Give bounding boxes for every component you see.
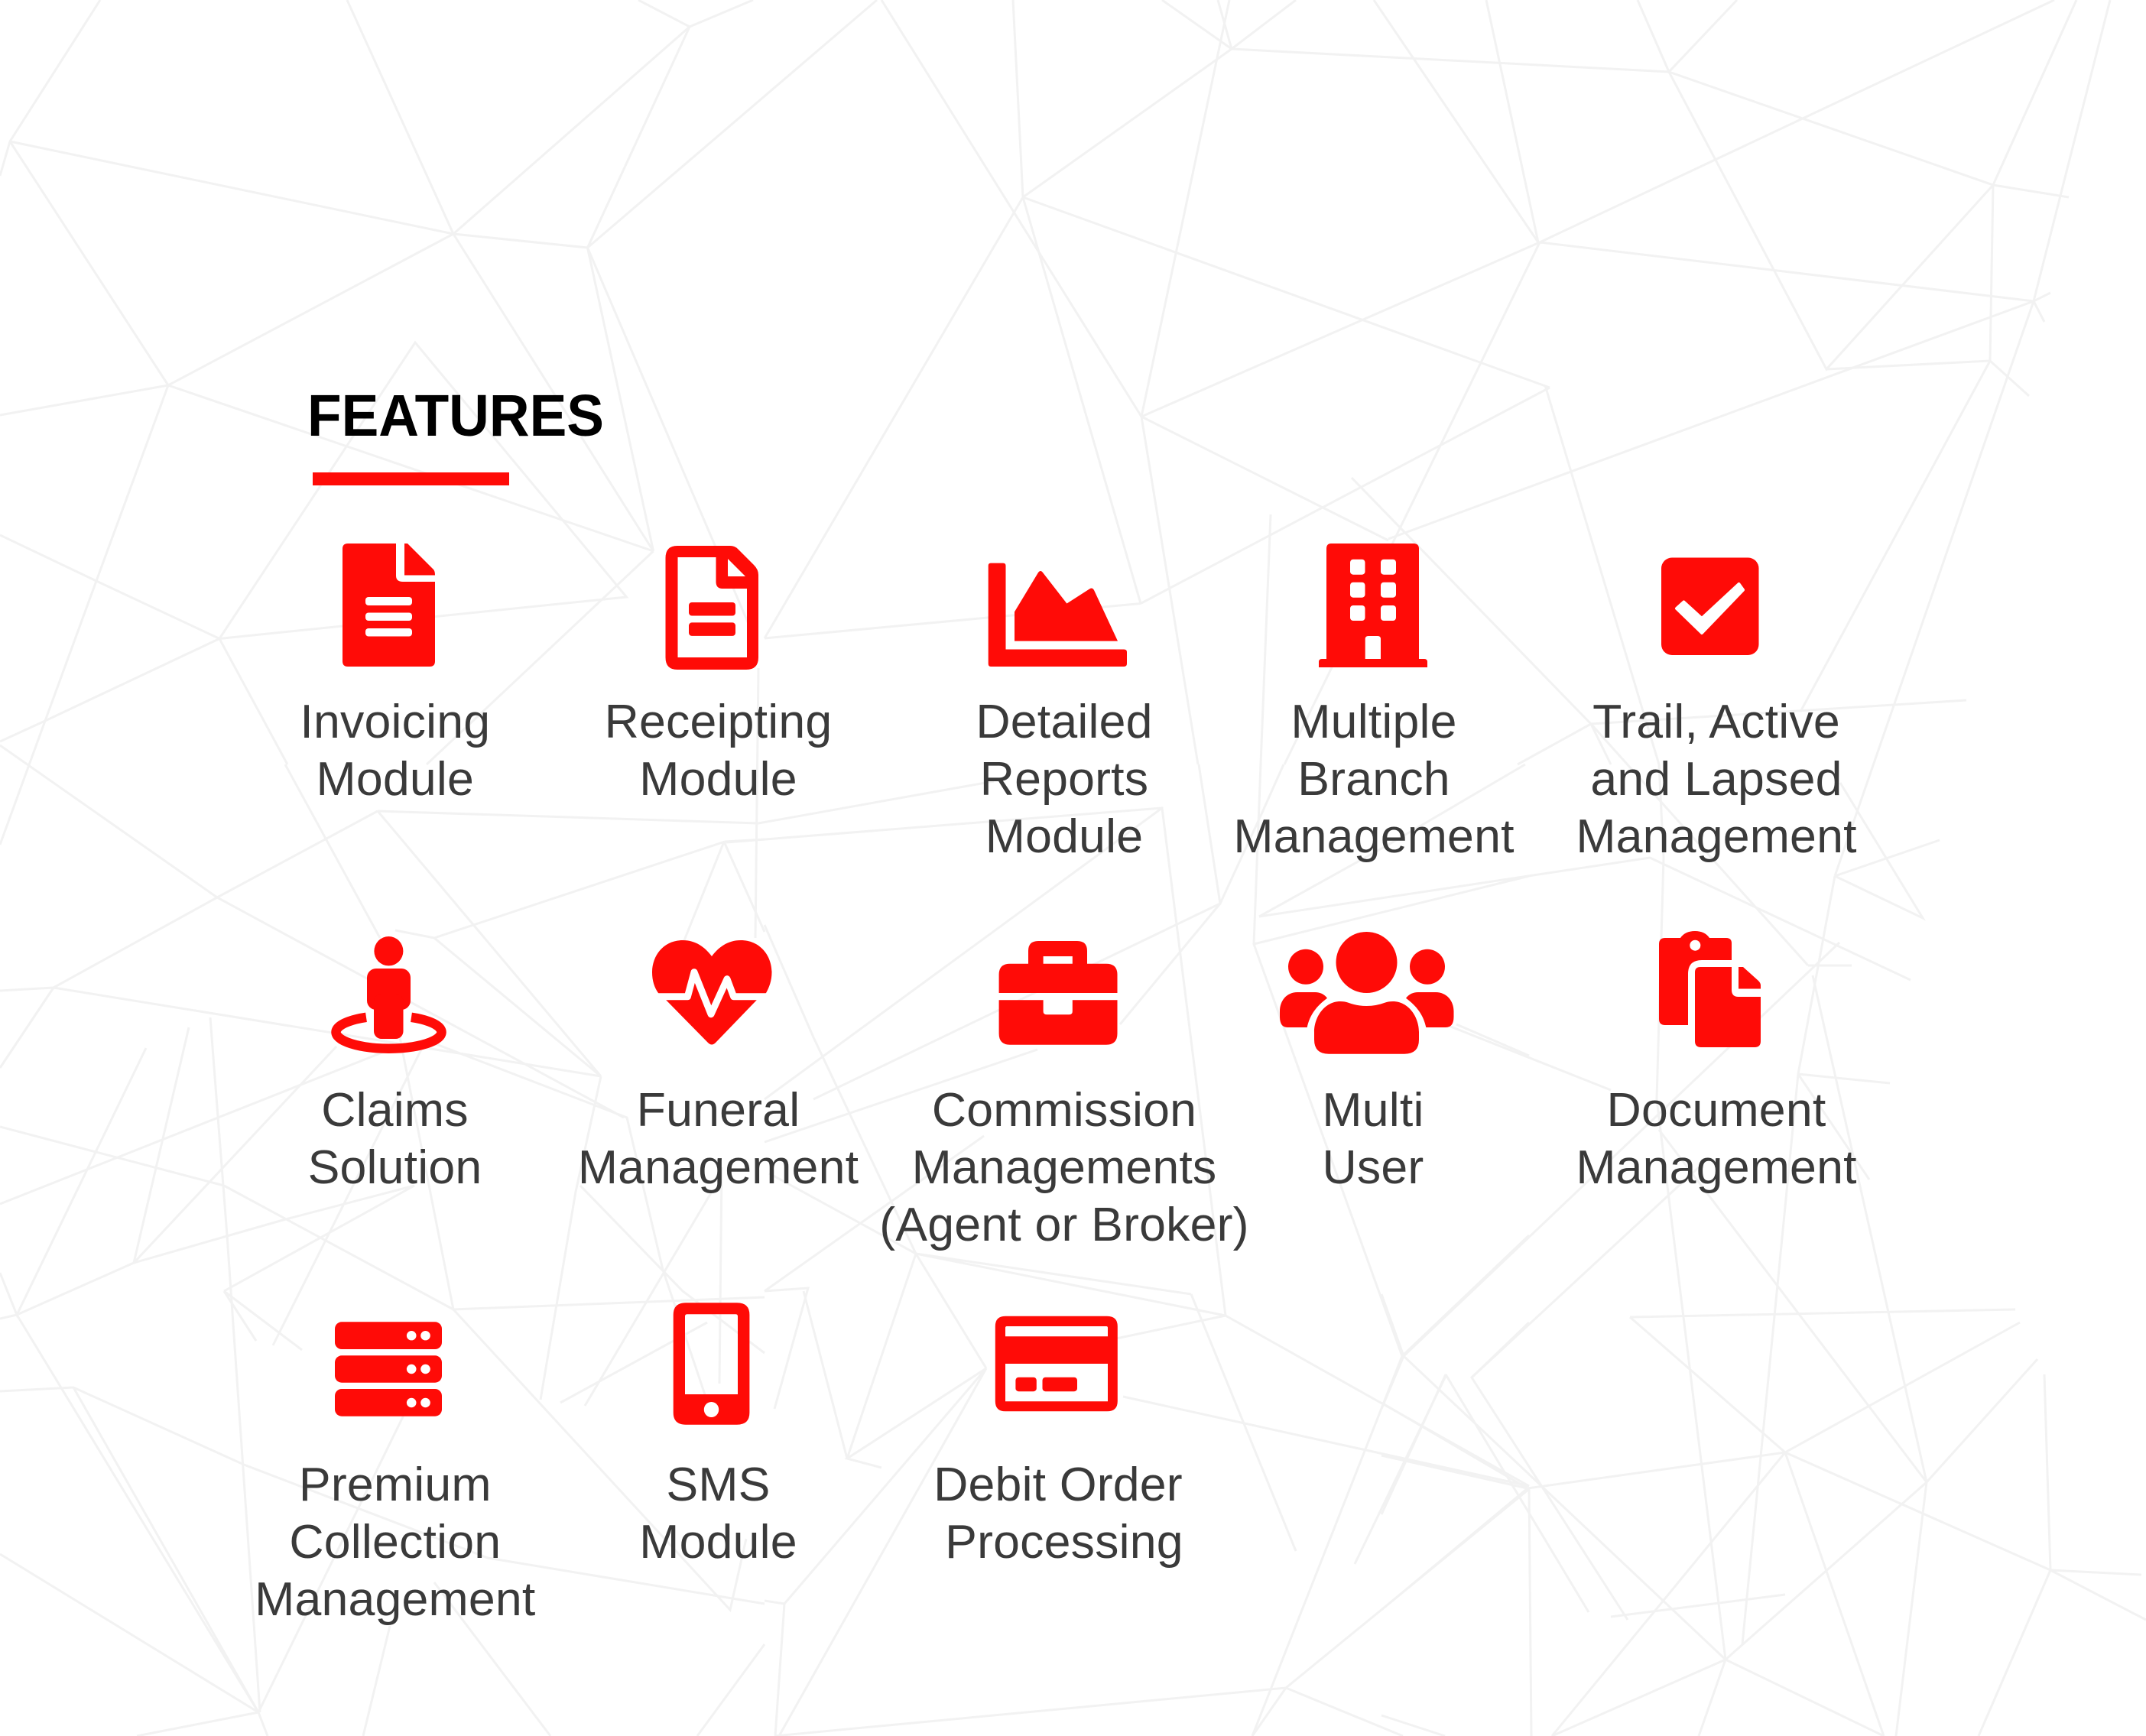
label: Management (1233, 810, 1515, 863)
icon: briefcase (999, 941, 1118, 1045)
icon: server stack (335, 1322, 442, 1416)
label: Module (639, 1515, 797, 1569)
label: Commission (932, 1083, 1196, 1137)
label: Funeral (637, 1083, 800, 1137)
label: Collection (289, 1515, 501, 1569)
label: Solution (308, 1141, 482, 1194)
label: Module (639, 752, 797, 806)
icon: heart with pulse (652, 940, 772, 1044)
label: Processing (945, 1515, 1183, 1569)
feature: Premium Collection Management (255, 1322, 535, 1626)
icon: person in ring (336, 936, 442, 1049)
label: Document (1607, 1083, 1826, 1137)
label: (Agent or Broker) (879, 1198, 1249, 1251)
label: Multi (1322, 1083, 1424, 1137)
feature: Receipting Module (605, 546, 832, 806)
label: SMS (666, 1458, 771, 1511)
icon: invoice document (343, 544, 435, 667)
label: Multiple (1291, 695, 1457, 748)
label: Management (578, 1141, 859, 1194)
icon: user group (1280, 932, 1454, 1054)
icon: area chart (989, 563, 1127, 667)
label: and Lapsed (1590, 752, 1842, 806)
icon: mobile phone (674, 1303, 749, 1425)
feature: Invoicing Module (300, 544, 490, 806)
feature: Trail, Active and Lapsed Management (1576, 558, 1857, 863)
title underline (313, 472, 509, 485)
icon: office building (1319, 544, 1427, 667)
icon: checkbox (1661, 558, 1758, 655)
feature: Debit Order Processing (933, 1316, 1183, 1569)
label: User (1323, 1141, 1424, 1194)
feature: SMS Module (639, 1303, 797, 1569)
icon: receipt document (665, 546, 758, 670)
feature: Claims Solution (308, 936, 482, 1194)
label: Detailed (976, 695, 1153, 748)
icon: payment card (995, 1316, 1118, 1411)
label: Management (255, 1572, 535, 1626)
label: Managements (912, 1141, 1216, 1194)
feature: Multi User (1280, 932, 1454, 1194)
label: Receipting (605, 695, 832, 748)
icon: clipboard and document (1659, 931, 1761, 1047)
label: Module (985, 810, 1143, 863)
label: Trail, Active (1592, 695, 1840, 748)
label: Reports (980, 752, 1148, 806)
feature: Funeral Management (578, 940, 859, 1194)
label: Invoicing (300, 695, 490, 748)
title: FEATURES (307, 383, 604, 449)
feature: Document Management (1576, 931, 1857, 1194)
label: Management (1576, 810, 1857, 863)
feature: Multiple Branch Management (1233, 544, 1515, 863)
label: Debit Order (933, 1458, 1183, 1511)
label: Premium (299, 1458, 492, 1511)
label: Management (1576, 1141, 1857, 1194)
label: Module (317, 752, 474, 806)
label: Claims (321, 1083, 469, 1137)
feature: Detailed Reports Module (976, 563, 1153, 863)
feature: Commission Managements (Agent or Broker) (879, 941, 1249, 1251)
label: Branch (1297, 752, 1450, 806)
